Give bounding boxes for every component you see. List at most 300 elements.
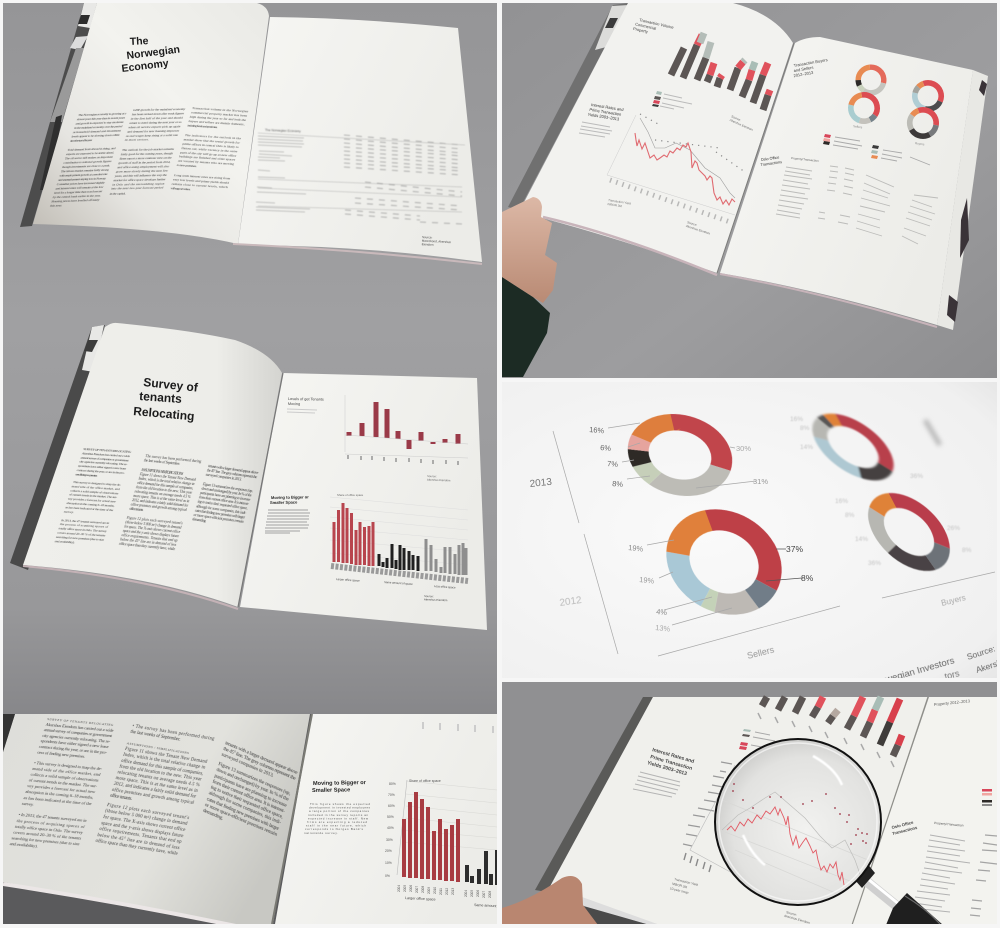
body text column 3: Long term interest rates are rising from	[174, 173, 231, 180]
photo: close-up of donut charts: 2012	[559, 595, 583, 609]
blurred buyer labels: 36%	[868, 560, 881, 567]
heading: office transactions: Oslo Office	[761, 155, 780, 162]
body text column 3: down and unchanged) by year. In % of the	[216, 768, 289, 803]
body text column 1: Akershus Eiendom has carried out a wide	[45, 722, 114, 733]
transaction list	[912, 821, 997, 916]
magnifying glass	[715, 739, 943, 925]
photo: report spread with bar chart, line chart and donuts: Source:	[687, 220, 698, 227]
body text column 2: The outlook for the job market remains	[122, 147, 175, 152]
body text column 2: when oil service exports pick up again	[128, 124, 181, 129]
body text column 1: Total demand from abroad is rising, and	[67, 146, 116, 153]
heading: interest rates	[646, 747, 695, 777]
axes and leader lines	[553, 423, 995, 656]
book spine strip	[20, 3, 97, 227]
body text column 1: as has been indicated at the time of the	[65, 505, 114, 512]
body text column 1: searching for new premises (due to size	[11, 835, 80, 846]
x axis ticks	[684, 853, 711, 872]
body text column 2: in the first half of the year and should	[130, 116, 184, 121]
forecast table	[256, 128, 465, 224]
body text column 1: annual survey of companies or government	[80, 455, 129, 462]
blurred buyer labels: 8%	[962, 547, 972, 554]
body text column 2: Index, which is the total relative change in	[138, 477, 195, 487]
body text column 2: • The survey has been performed during	[131, 724, 216, 742]
body text column 1: The labour market remains fairly strong	[60, 168, 110, 173]
heading: interest rates: Interest Rates and	[651, 747, 695, 765]
blurred buyer labels: 16%	[790, 416, 803, 423]
heading: office transactions: Transactions	[892, 825, 918, 836]
hand over page	[502, 876, 598, 925]
body text column 3	[192, 464, 258, 523]
chart legend: 10-year swap	[669, 886, 689, 895]
photo: close-up of donut charts: Norwegian Investors	[870, 655, 956, 690]
text block: moving: included in the survey reports an	[308, 813, 368, 817]
body text column 1: contract during the year, or are in the pro-	[76, 468, 126, 476]
body text column 1: and availability).	[54, 539, 76, 544]
body text column 1: and unemployment staying low in Norway.	[58, 176, 107, 182]
body text column 1: searching for new premises (due to size	[55, 535, 105, 542]
bar chart: share of office space: 2004	[397, 885, 401, 892]
bar chart: share of office space: Less office space	[434, 584, 456, 590]
body text column 2: more space. This is at the same level as in	[115, 776, 199, 794]
donut labels: 4%	[656, 607, 668, 617]
body text column 3: from their current office area. It is interest-	[198, 495, 250, 506]
body text column 1: This survey is designed to map the de-	[72, 480, 123, 487]
sleeve	[502, 277, 550, 377]
heading: moving to bigger or smaller space: Smaller Space	[312, 787, 350, 794]
heading: interest rates: Prime Transaction	[649, 754, 693, 772]
body text column 2: ASSUMPTIONS / SIMPLIFICATIONS	[141, 468, 184, 476]
body text column 1: and growth is expected to stay moderate	[75, 120, 125, 126]
title: Economy	[121, 57, 169, 75]
heading: moving to bigger or smaller space: Moving to Bigger or	[271, 494, 309, 500]
blurred buyer labels: 16%	[835, 498, 848, 505]
left page	[3, 714, 310, 924]
body text column 3: from their current office area. It is interest-	[212, 780, 286, 815]
body text column 1: • This survey is designed to map the de-	[34, 760, 103, 771]
bar chart: share of office space: 2006	[476, 890, 480, 897]
hand holding page	[502, 197, 557, 303]
bar chart: share of office space: Share of office space	[337, 493, 364, 497]
body text column 1: this year.	[50, 204, 63, 208]
body text column 3: Figure 13 summarizes the responses (up,	[217, 762, 291, 797]
bar tick labels	[758, 713, 894, 767]
donut labels: 30%	[736, 444, 751, 453]
body text column 2: the last weeks of September.	[143, 458, 181, 466]
body text column 2: relocating tenants on average needs 4.5 %	[134, 490, 191, 499]
body text column 3: cates that finding new premises with larger	[206, 797, 280, 832]
body text column 3: ing to notice their requested office space,	[197, 500, 248, 512]
body text column 1: slower pace this year than in recent years	[76, 116, 126, 121]
body text column 1: annual survey of companies or government	[43, 727, 114, 738]
bar chart: share of office space: 40%	[387, 826, 394, 830]
body text column 3: very low levels and prime yields should	[172, 177, 230, 185]
photo: close-up of donut charts: tors	[943, 668, 961, 682]
donut: sellers 2013	[631, 421, 729, 489]
body text column 3: the 45° line. The grey columns represent the	[222, 747, 296, 782]
transaction tables	[776, 156, 938, 244]
bar chart ticks	[348, 455, 458, 465]
source notes: Akershus Eiendom	[729, 118, 754, 132]
bar chart: share of office space: 50%	[387, 815, 394, 819]
body text column 3: tenants with a larger demand appear above	[208, 464, 259, 475]
body text column 3: participants have are planning to increase	[200, 491, 251, 502]
heading: office transactions: Oslo Office	[891, 820, 914, 830]
body text column 2: years, and this will influence the way the	[114, 173, 168, 179]
transaction tables: Property/Transaction	[791, 156, 819, 163]
body text column 2: office premises and growth among typical	[111, 788, 195, 806]
heading: moving to bigger or smaller space	[312, 780, 367, 794]
title: Survey of	[143, 375, 200, 395]
body text column 2: fairly good for the coming years, though	[120, 151, 174, 157]
y axis labels	[683, 762, 732, 846]
body text column 1: SURVEY OF TENANTS RELOCATING	[47, 717, 115, 727]
body text column 3: parts of the city will go up as new office	[180, 150, 237, 158]
body text column 2	[118, 454, 203, 552]
body text column 3: tenants with a larger demand appear above	[224, 741, 298, 776]
body text column 1: totally office space in Oslo. The survey	[14, 824, 85, 835]
body text column 2: office premises and growth among typical	[130, 502, 187, 512]
bar chart: share of office space: 60%	[388, 804, 395, 808]
source note: Eiendom	[422, 242, 434, 247]
body text column 3: Figure 13 summarizes the responses (up,	[202, 482, 254, 494]
title: Relocating	[133, 404, 195, 423]
body text column 3: buildings are finished and older spaces	[179, 155, 236, 162]
body text column 1: exports are expected to be stable ahead.	[66, 151, 115, 156]
heading: moving to bigger or smaller space: Smaller Space	[270, 500, 298, 505]
body text column 3: The indicators for the outlook in the	[184, 133, 242, 140]
body text column 3: demanding.	[202, 809, 224, 822]
body text column 1: vey provides a forecast for actual new	[67, 497, 117, 504]
body text column 2: office demand for this sample of companies,	[136, 481, 194, 491]
body text column 2: 2012, and indicates a fairly solid demand for	[113, 782, 197, 800]
legend: donuts	[982, 789, 992, 806]
body text column 2: Figure 11 shows the Tenant New Demand	[139, 472, 197, 482]
legend: line chart: NIBOR 3M	[607, 202, 623, 208]
body text column 3: surveyed companies in 2013.	[205, 473, 242, 482]
body text column 1: city agencies currently relocating. The re-	[42, 733, 112, 744]
body text column 1: covers around 20–30 % of the tenants	[13, 829, 82, 841]
transaction list: Property/Transaction	[934, 821, 964, 828]
body text column 3: including funds and syndicates.	[187, 123, 218, 129]
body text column 1: of current trends in the market. The sur-	[28, 777, 98, 789]
axis captions for donuts: Sellers	[853, 124, 863, 130]
bar chart: share of office space: 2006	[409, 885, 413, 892]
bar chart: share of office space: Larger office space	[336, 577, 360, 583]
body text column 2: below the 45° line are in demand of less	[120, 538, 177, 547]
source note: Source:	[422, 235, 432, 240]
donut labels: 7%	[607, 459, 619, 469]
bar chart: share of office space: 2013	[451, 888, 455, 895]
body text column 3: are vacated by tenants who are moving	[177, 159, 235, 166]
body text column 1: level for a longer time than was forecast	[54, 189, 103, 195]
top tick labels	[423, 722, 493, 733]
source note: Source:	[786, 910, 797, 917]
body text column 2: as real wages keep rising at a solid rate	[126, 133, 179, 138]
body text column 1: Housing prices have levelled off lately	[51, 198, 100, 204]
right page	[852, 697, 997, 925]
stacked bar chart	[671, 33, 770, 110]
legend: line chart: Transaction Yield	[608, 198, 631, 206]
text block: moving	[304, 802, 371, 835]
heading: moving to bigger or smaller space: Moving to Bigger or	[313, 780, 367, 787]
line chart	[607, 114, 745, 222]
body text column 3: buyers and sellers are mainly domestic,	[188, 119, 245, 127]
heading: transaction volume: Property	[633, 26, 648, 34]
heading: interest rates: Yields 2003–2013	[646, 760, 688, 777]
body text column 1: of current trends in the market. The sur-	[69, 493, 119, 500]
blurred object upper right	[925, 420, 940, 445]
body text column 1: covers around 20–30 % of the tenants	[57, 531, 107, 537]
text block: moving: a large portion of the companies	[309, 809, 370, 813]
spine	[272, 714, 312, 924]
body text column 2: the last weeks of September.	[130, 730, 181, 743]
heading: transaction volume: Commercial	[635, 21, 657, 31]
body text column 1: cess of finding new premises.	[37, 749, 86, 759]
body text column 1: survey.	[21, 801, 35, 807]
heading: buyers and sellers: Transaction Buyers	[793, 57, 828, 68]
body text column 1: as has been indicated at the time of the	[23, 795, 93, 806]
body text column 1: the process of acquiring spaces of	[16, 818, 86, 829]
heading: interest rates: Interest Rates and	[591, 102, 624, 112]
body text column 2	[109, 107, 187, 196]
body text column 3: commercial property market has been	[191, 110, 248, 118]
body text column 2: grow more slowly during the next few	[116, 169, 169, 173]
text block: moving: This figure shows the expected	[310, 802, 370, 806]
lens glare	[813, 756, 842, 785]
body text column 1: with employment growth at a modest rate	[59, 172, 109, 178]
body text column 2: from the old location to the new. This year	[135, 485, 193, 495]
right page heading: Property 2012–2013	[934, 698, 971, 707]
background of left photo column	[3, 3, 497, 714]
left page	[547, 697, 928, 925]
body text column 1: totally office space in Oslo. The survey	[58, 526, 108, 533]
body text column 2: growth of staff in the period from 2014,	[118, 160, 171, 166]
body text column 1: levels appear to be slowing down a little	[71, 133, 121, 138]
donut: buyers 2012	[864, 499, 954, 565]
body text column 3: or more space-efficient premises remain	[193, 513, 244, 524]
bar chart: share of office space: 2008	[421, 886, 425, 893]
body text column 2: relocating tenants on average needs 4.5 %	[117, 770, 200, 788]
photo: close-up of donut charts	[502, 382, 1000, 690]
title: The	[130, 35, 149, 48]
body text column 1: • In 2013, the 47 tenants surveyed are in	[18, 812, 88, 824]
body text column 1: mand side of the office market, and	[71, 484, 121, 492]
body text column 2: Figure 12 plots each surveyed tenant's	[106, 803, 190, 821]
body text column 3: market show that the rental growth for	[183, 137, 241, 145]
heading: moving to bigger or smaller space	[270, 494, 309, 505]
text block: moving: corresponds to Norges Bank's	[305, 827, 364, 831]
source notes: Source:	[731, 114, 742, 122]
body text column 1: collects a solid sample of observations	[30, 772, 100, 783]
text block: moving: staff in the near future, which	[306, 824, 366, 828]
right page	[238, 17, 482, 262]
body text column 1: in the mainland economy over the period	[74, 124, 123, 130]
text block: moving	[265, 510, 310, 533]
body text column 2: 2012, and indicates a fairly solid demand for	[131, 498, 189, 509]
donut labels: 31%	[753, 477, 768, 486]
body text column 2: (those below 5 000 m²) change in demand	[104, 808, 189, 827]
body text column 3: demanding.	[192, 517, 207, 523]
body text column 3: prime offices in central Oslo is likely to	[182, 142, 239, 149]
body text column 2: for space. The X-axis shows current office	[102, 815, 186, 833]
donut labels: 6%	[600, 443, 612, 453]
body text column 2	[95, 724, 216, 857]
blurred buyer labels: 14%	[855, 536, 868, 543]
source note: Macrobond, Akershus	[422, 239, 451, 244]
left page	[519, 3, 793, 273]
photo: magnifying glass over line chart	[502, 682, 997, 925]
body text column 2: Index, which is the total relative change in	[122, 753, 206, 771]
body text column 3: surveyed companies in 2013.	[221, 753, 274, 779]
body text column 3: participants have are planning to increase	[214, 774, 287, 809]
donut labels: 13%	[655, 623, 671, 634]
heading: buyers and sellers: and Sellers	[793, 65, 814, 73]
body text column 1: Consumer prices have increased slightly	[56, 181, 106, 186]
donut labels: 37%	[786, 544, 803, 554]
body text column 2: in most sectors.	[124, 138, 150, 142]
body text column 2: office requirements. Tenants that end up	[121, 533, 178, 543]
left page	[23, 323, 282, 607]
text block: interest rates	[633, 772, 680, 797]
body text column 1: survey.	[63, 509, 75, 514]
body text column 1	[54, 447, 133, 546]
photo: report spread with bar chart, line chart and donuts	[502, 3, 997, 378]
bar chart: share of office space: 2005	[403, 885, 407, 892]
photo: report spread with bar chart, line chart and donuts: Buyers	[915, 141, 925, 147]
legend: donuts	[823, 134, 930, 165]
body text column 3: will support values.	[170, 186, 191, 191]
body text column 1: The Norwegian economy is growing at a	[78, 111, 127, 117]
body text column 3	[170, 106, 250, 193]
body text column 1: spondents have either signed a new lease	[40, 738, 110, 749]
dark strip under page	[583, 905, 650, 925]
body text column 1: vey provides a forecast for actual new	[27, 783, 97, 794]
bar chart: share of office space: 70%	[388, 793, 395, 797]
bar chart: share of office space: 2005	[470, 890, 474, 897]
body text column 3	[202, 741, 298, 844]
heading: office transactions: Transactions	[760, 160, 782, 167]
body text column 2: (those below 5 000 m²) change in demand	[125, 520, 182, 530]
bar chart: share of office space: 30%	[386, 838, 393, 842]
body text column 1: the process of acquiring spaces of	[59, 522, 109, 529]
donut labels: 19%	[628, 543, 644, 554]
body text column 2: space and the y-axis shows displays future	[100, 821, 184, 839]
title: Norwegian	[126, 44, 181, 62]
cover strip and shadow	[10, 325, 105, 570]
body text column 2: and office using employment will also	[117, 164, 170, 169]
donut: sellers 2012	[665, 513, 783, 611]
body text column 3: remain close to current levels, which	[171, 182, 229, 190]
heading: interest rates: Prime Transaction	[589, 107, 622, 117]
back cover edge with stripes	[508, 3, 628, 210]
bar chart: share of office space	[385, 779, 497, 908]
body text column 2: for space. The X-axis shows current office	[124, 525, 181, 534]
body text column 2: space and the y-axis shows displays future	[122, 529, 180, 539]
body text column 3: although for some companies, this indi-	[208, 791, 282, 826]
body text column 1: and interest rates will remain at the low	[55, 185, 105, 191]
text block: moving: development in invested employees	[309, 806, 371, 810]
body text column 2: office tenants.	[129, 507, 144, 512]
dark cover edge	[535, 697, 653, 892]
body text column 2: ASSUMPTIONS / SIMPLIFICATIONS	[126, 741, 190, 755]
body text column 1: SURVEY OF TENANTS RELOCATING	[83, 447, 132, 454]
blurred buyer labels: 36%	[910, 473, 923, 480]
title: tenants	[139, 389, 183, 406]
text block: moving: firms are expecting a reduced	[307, 820, 367, 824]
body text column 3: Transaction volume in the Norwegian	[192, 106, 249, 113]
body text column 2: office tenants.	[109, 793, 133, 802]
body text column 3: or more space-efficient premises remain	[204, 803, 278, 838]
blurred buyer labels: 14%	[800, 444, 813, 451]
photo: close-up of donut charts: Buyers	[940, 593, 967, 608]
axis years: 2013	[529, 477, 553, 490]
body text column 2: The survey has been performed during	[145, 454, 202, 464]
body text column 3: high during the year so far and both the	[189, 115, 247, 122]
photo: report spread with bar chart, line chart and donuts: Akershus Eiendom	[685, 224, 711, 236]
body text column 2: has been revised down after weak figures	[132, 111, 185, 116]
body text column 2: in the capital.	[109, 192, 126, 196]
source note: Akershus Eiendom	[784, 914, 811, 925]
body text column 1: though investments are close to a peak.	[62, 164, 111, 169]
body text column 3: to new premises.	[176, 163, 198, 168]
photo: report spread with Survey of tenants Relocating	[10, 323, 487, 630]
body text column 2: market for office space develops further	[113, 177, 167, 182]
donut labels: 16%	[589, 425, 605, 435]
bar chart: share of office space: 20%	[385, 849, 392, 853]
bar chart: share of office space: 2007	[482, 891, 486, 898]
right page	[240, 373, 487, 630]
body text column 2: firms report a more cautious view on the	[119, 156, 173, 161]
body text column 1: absorption in the coming 6–18 months,	[25, 789, 94, 801]
bar chart: share of office space: 10%	[385, 861, 392, 865]
source note: Source:	[427, 474, 437, 478]
body text column 1: absorption in the coming 6–18 months,	[66, 501, 115, 509]
body text column 1	[9, 717, 117, 852]
body text column 1	[50, 111, 128, 208]
legend: stacked bars	[739, 729, 775, 750]
source note: Source:	[424, 594, 434, 598]
photo: close-up of report text and bar chart	[3, 714, 497, 926]
body text column 1: collects a solid sample of observations	[70, 488, 120, 495]
source note: Akershus Eiendom	[424, 597, 448, 602]
bar chart: share of office space: Larger office space	[405, 896, 436, 902]
body text column 2: office space than they currently have, while	[95, 839, 178, 857]
body text column 1: spondents have either signed a new lease	[77, 464, 127, 471]
bar chart: share of office space: 2012	[445, 888, 449, 895]
forecast table: The Norwegian Economy	[265, 128, 301, 133]
donut charts small	[849, 66, 945, 140]
bar chart: share of office space: Same amount	[474, 903, 497, 908]
blurred buyer labels: 8%	[845, 512, 855, 519]
heading: tenants moving: Levels of get Tenants	[288, 397, 324, 402]
body text column 2: into the next two-year forecast period	[111, 186, 164, 191]
body text column 2: GDP growth for the mainland economy	[133, 107, 186, 112]
body text column 2: more space. This is at the same level as in	[133, 494, 190, 503]
bar chart: share of office space: 0%	[385, 874, 390, 878]
body text column 1: Akershus Eiendom has carried out a wide	[81, 451, 131, 458]
donut labels: 19%	[639, 575, 655, 586]
photo: close-up of donut charts: Source:	[966, 643, 996, 662]
body text column 2: Figure 12 plots each surveyed tenant's	[126, 516, 184, 526]
body text column 3: flatten out, while vacancy in the outer	[181, 146, 239, 154]
donut labels	[589, 425, 814, 634]
body text column 2: in Oslo and the surrounding region	[112, 181, 165, 186]
body text column 2: and demand for new housing improves	[127, 129, 180, 133]
body text column 1: The oil sector still makes an important	[64, 155, 113, 161]
left page	[33, 3, 269, 244]
body text column 1: cess of finding new premises.	[75, 472, 99, 478]
body text column 1: contribution to national growth figures	[63, 159, 113, 165]
